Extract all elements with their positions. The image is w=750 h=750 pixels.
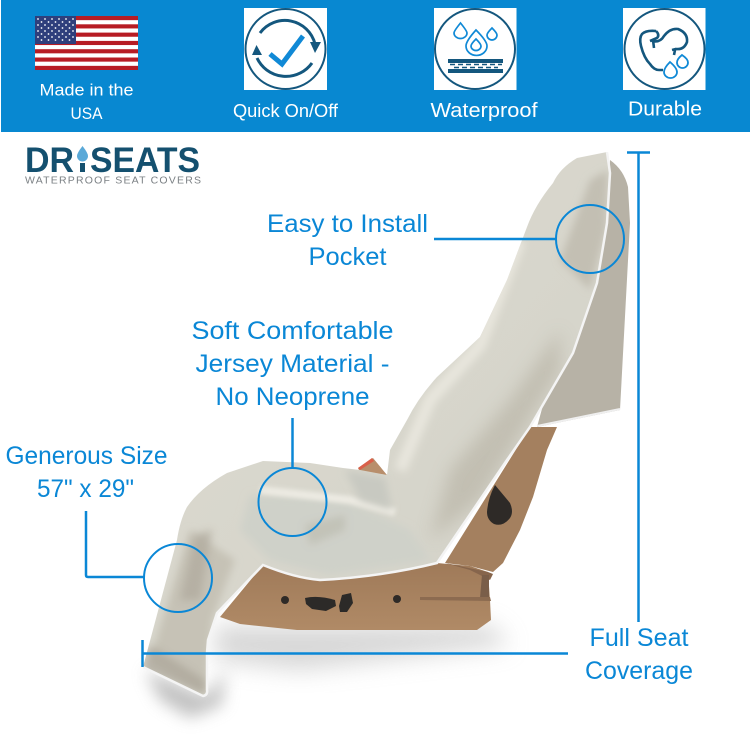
icon: durable <box>623 8 706 90</box>
logo: DriSeats: WATERPROOF SEAT COVERS <box>25 174 201 186</box>
header band <box>1 0 750 132</box>
back flap <box>537 160 630 427</box>
seat base <box>220 563 491 630</box>
label: USA: USA <box>70 104 103 123</box>
cover folds <box>143 170 608 695</box>
callout: generous size: Generous Size <box>6 442 168 470</box>
logo: DriSeats: SEATS <box>90 141 200 180</box>
buckle <box>358 458 387 475</box>
label: Waterproof: Waterproof <box>430 100 538 122</box>
recliner lever <box>487 485 512 525</box>
control buttons <box>281 593 401 612</box>
callout: soft jersey material <box>192 317 394 536</box>
label: Quick On/Off: Quick On/Off <box>233 101 339 121</box>
callout: easy to install pocket: Pocket <box>308 243 387 271</box>
dimension lines: full seat coverage: Full Seat <box>590 624 689 652</box>
cover <box>143 152 610 696</box>
icon: quick on/off <box>244 8 327 90</box>
logo: DriSeats: DR <box>25 141 74 180</box>
icon: waterproof <box>434 8 516 90</box>
callout: soft jersey material: Jersey Material - <box>196 350 390 378</box>
label: Made in the USA: Made in the <box>40 80 134 100</box>
callout: generous size <box>6 442 212 612</box>
icon: US flag <box>35 16 138 70</box>
seat back <box>445 427 557 572</box>
cover piping <box>143 152 610 696</box>
dimension lines: full seat coverage <box>142 152 693 685</box>
callout: generous size: 57" x 29" <box>37 475 134 503</box>
callout: soft jersey material: Soft Comfortable <box>192 317 394 345</box>
callout: soft jersey material: No Neoprene <box>216 383 370 411</box>
label: Durable: Durable <box>628 98 702 120</box>
callout: easy to install pocket <box>267 205 624 273</box>
seat illustration <box>143 152 630 718</box>
dimension lines: full seat coverage: Coverage <box>585 657 693 685</box>
shadows <box>145 625 510 718</box>
callout: easy to install pocket: Easy to Install <box>267 210 428 238</box>
logo: DriSeats <box>25 141 201 186</box>
